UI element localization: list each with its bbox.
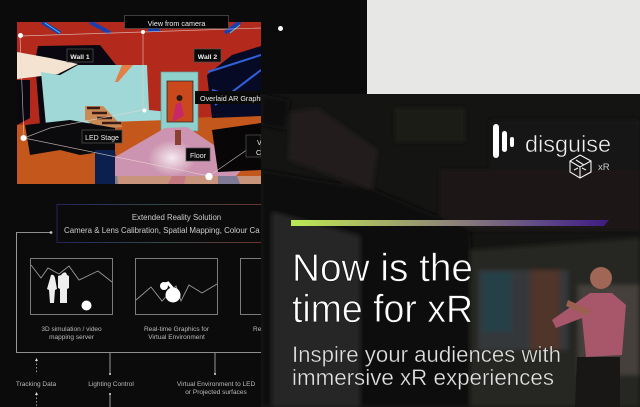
label: LED stage [82, 130, 122, 143]
label: overlaid AR graphic [195, 91, 266, 104]
label: cropped V C: C [256, 150, 261, 157]
label: view from camera: View from camera [148, 19, 205, 28]
box: third, cropped [240, 258, 270, 314]
panel: extended reality solution: Camera & Lens Calibration, Spatial Mapping, Colour Ca [64, 226, 260, 235]
presenter [552, 267, 626, 407]
panel: front card with studio photo [261, 94, 640, 407]
title: Now is the [292, 247, 473, 290]
caption: cropped: Re [253, 326, 262, 333]
label: floor [186, 148, 210, 161]
label: wall 1 [67, 49, 93, 62]
label: wall 2: Wall 2 [198, 54, 217, 61]
caption: real-time graphics: Virtual Environment [148, 334, 205, 341]
panel: light grey corner [367, 0, 640, 94]
title: time for xR [292, 288, 473, 331]
gradient bar [291, 220, 609, 226]
label: cropped V C [246, 135, 262, 157]
icon: xR cube [570, 155, 591, 178]
label: virtual environment: or Projected surfaces [185, 389, 247, 396]
label: floor: Floor [190, 153, 207, 160]
box: 3D simulation [30, 258, 112, 314]
caption: 3D simulation: 3D simulation / video [41, 326, 102, 333]
label: lighting control: Lighting Control [88, 381, 134, 388]
label: cropped V C: V [257, 140, 262, 147]
connector line [16, 232, 261, 352]
stage guide lines [20, 28, 261, 176]
label: tracking data: Tracking Data [16, 381, 56, 388]
guide points [18, 26, 283, 180]
panel: extended reality solution [57, 204, 267, 242]
label: overlaid AR graphic: Overlaid AR Graphic [200, 94, 266, 103]
subtitle: Inspire your audiences with [292, 342, 561, 367]
label: virtual environment: Virtual Environment to LED [177, 381, 255, 388]
label: wall 2 [194, 49, 221, 62]
caption: 3D simulation: mapping server [49, 334, 95, 341]
panel: stage illustration [17, 22, 261, 184]
subtitle: immersive xR experiences [292, 365, 554, 390]
arrows [35, 353, 216, 407]
panel: extended reality solution: Extended Reality Solution [132, 213, 221, 222]
logo: disguise wordmark: disguise [525, 131, 611, 157]
label: wall 1: Wall 1 [70, 54, 90, 61]
logo: disguise mark [493, 124, 514, 158]
box: real-time graphics [136, 258, 218, 314]
label: LED stage: LED Stage [85, 135, 119, 142]
label: xR: xR [598, 162, 610, 173]
label: view from camera [124, 16, 228, 28]
caption: real-time graphics: Real-time Graphics for [144, 326, 209, 333]
